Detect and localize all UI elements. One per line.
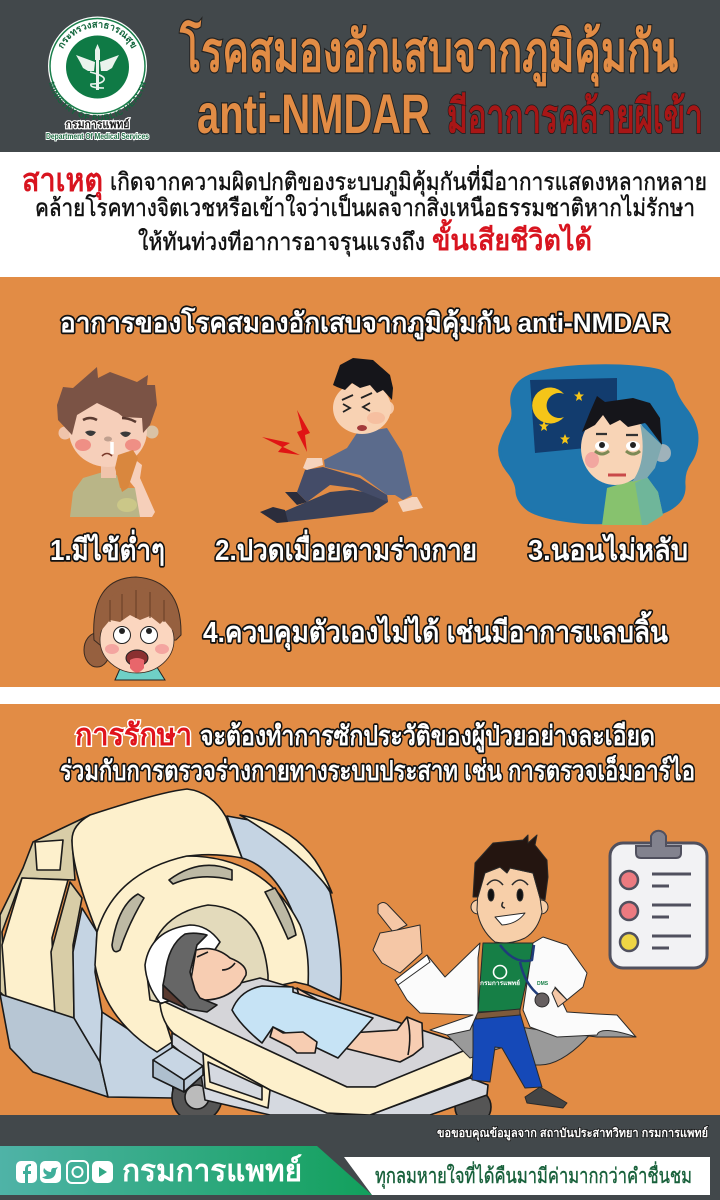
symptoms heading: อาการของโรคสมองอักเสบจากภูมิคุ้มกัน anti-NMDAR (60, 306, 670, 340)
title line 2: anti-NMDAR (197, 82, 430, 145)
icon: ministry logo: MINISTRY OF PUBLIC HEALTH (48, 82, 146, 120)
cause line 3: ให้ทันท่วงทีอาการอาจรุนแรงถึง (138, 228, 425, 257)
slogan banner (344, 1157, 710, 1195)
illustration: doctor (373, 835, 636, 1108)
illustration: doctor: กรมการแพทย์ (480, 979, 521, 987)
icon: boy with fever (57, 367, 158, 517)
cause keyword: สาเหตุ (22, 162, 103, 201)
cause warning: ขั้นเสียชีวิตได้ (432, 218, 592, 257)
icon: ministry logo: กรมการแพทย์ (66, 118, 130, 131)
patient (163, 933, 423, 1062)
label 1: 1.มีไข้ต่ำๆ (50, 529, 165, 567)
social icons (16, 1161, 113, 1183)
icon: ministry logo: Department Of Medical Services (46, 131, 149, 141)
org name: กรมการแพทย์ (122, 1154, 302, 1188)
label 4: 4.ควบคุมตัวเองไม่ได้ เช่นมีอาการแลบลิ้น (203, 610, 668, 650)
green banner (0, 1146, 372, 1195)
icon: ministry logo (46, 16, 150, 142)
panel: cause (0, 152, 720, 277)
icon: girl sticking out tongue (84, 577, 181, 680)
label 2: 2.ปวดเมื่อยตามร่างกาย (215, 529, 477, 567)
icon: clipboard (610, 831, 707, 968)
icon: ministry logo: กระทรวงสาธารณสุข (59, 22, 136, 49)
illustration: MRI scanner with patient (0, 789, 491, 1125)
treatment line 1: จะต้องทำการซักประวัติของผู้ป่วยอย่างละเอียด (200, 721, 655, 753)
icon: man with sore knee (260, 358, 423, 523)
label 3: 3.นอนไม่หลับ (528, 533, 688, 567)
panel: treatment (0, 704, 720, 1125)
icon: man cannot sleep (500, 366, 697, 525)
panel: symptoms (0, 277, 720, 687)
treatment keyword: การรักษา (75, 719, 192, 752)
illustration: doctor: DMS (537, 981, 549, 987)
panel: footer (0, 1115, 720, 1200)
panel: header (0, 0, 720, 152)
